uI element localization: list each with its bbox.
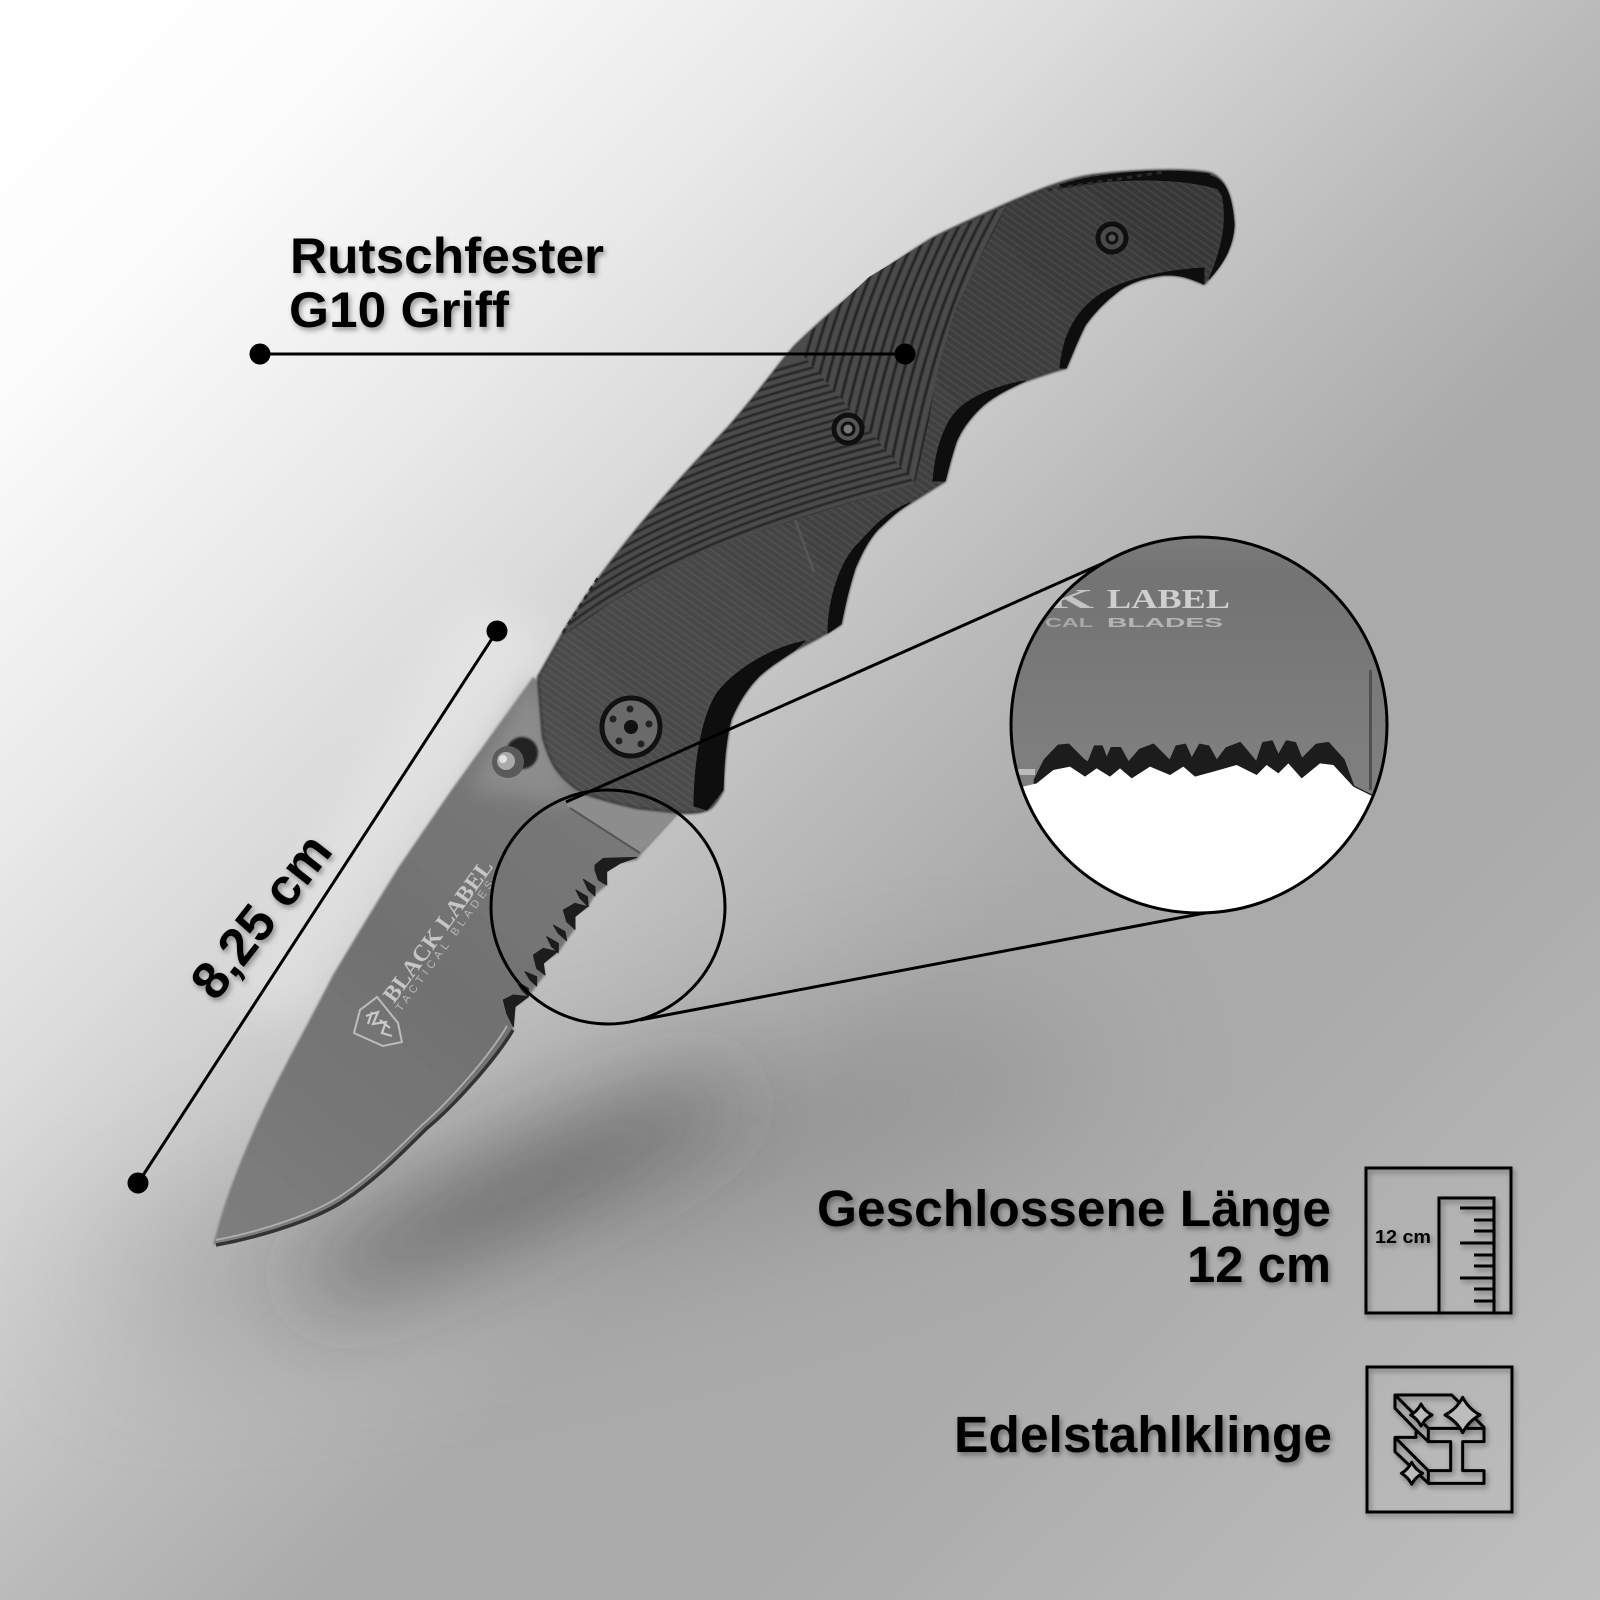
callout: enlarged serration lens [1010,536,1388,914]
callout line: grip [250,344,916,364]
heading: grip material: Rutschfester [290,228,604,284]
feature text: closed length: Geschlossene Länge [817,1180,1331,1237]
grip grooves [564,346,914,636]
dimension line: blade length [128,620,508,1194]
blade serration [503,857,637,1027]
blade engraving: BLACK LABEL [378,855,498,1007]
icon: ruler: 12 cm [1375,1227,1431,1247]
callout: enlarged serration lens: LABEL [1107,584,1230,614]
dimension label: blade length: 8,25 cm [180,823,344,1010]
feature text: stainless steel blade: Edelstahlklinge [954,1406,1332,1463]
callout: zoom lens connector lines [566,561,1205,1020]
callout: enlarged serration lens: BLADES [1107,615,1224,630]
folding knife [213,170,1234,1245]
feature text: closed length: 12 cm [1187,1236,1331,1293]
handle [497,170,1234,813]
heading: grip material: G10 Griff [289,282,509,338]
blade [213,677,700,1245]
knife ground shadow [76,972,1124,1378]
callout: enlarged serration lens: K [1046,584,1094,614]
screw: middle [834,415,862,443]
pivot screw [602,698,660,756]
blade stud [492,737,538,778]
callout: enlarged serration lens: CAL [1045,615,1093,630]
blade engraving: TACTICAL BLADES [394,879,496,1014]
icon: ruler [1366,1168,1511,1313]
blade engraving [354,855,498,1046]
feature text: closed length [817,1180,1331,1293]
icon: steel beam with sparkles [1367,1367,1512,1512]
finger choils [694,171,1234,810]
callout: small lens on serration [491,790,725,1024]
heading: grip material [289,228,604,338]
screw: rear [1098,224,1126,252]
